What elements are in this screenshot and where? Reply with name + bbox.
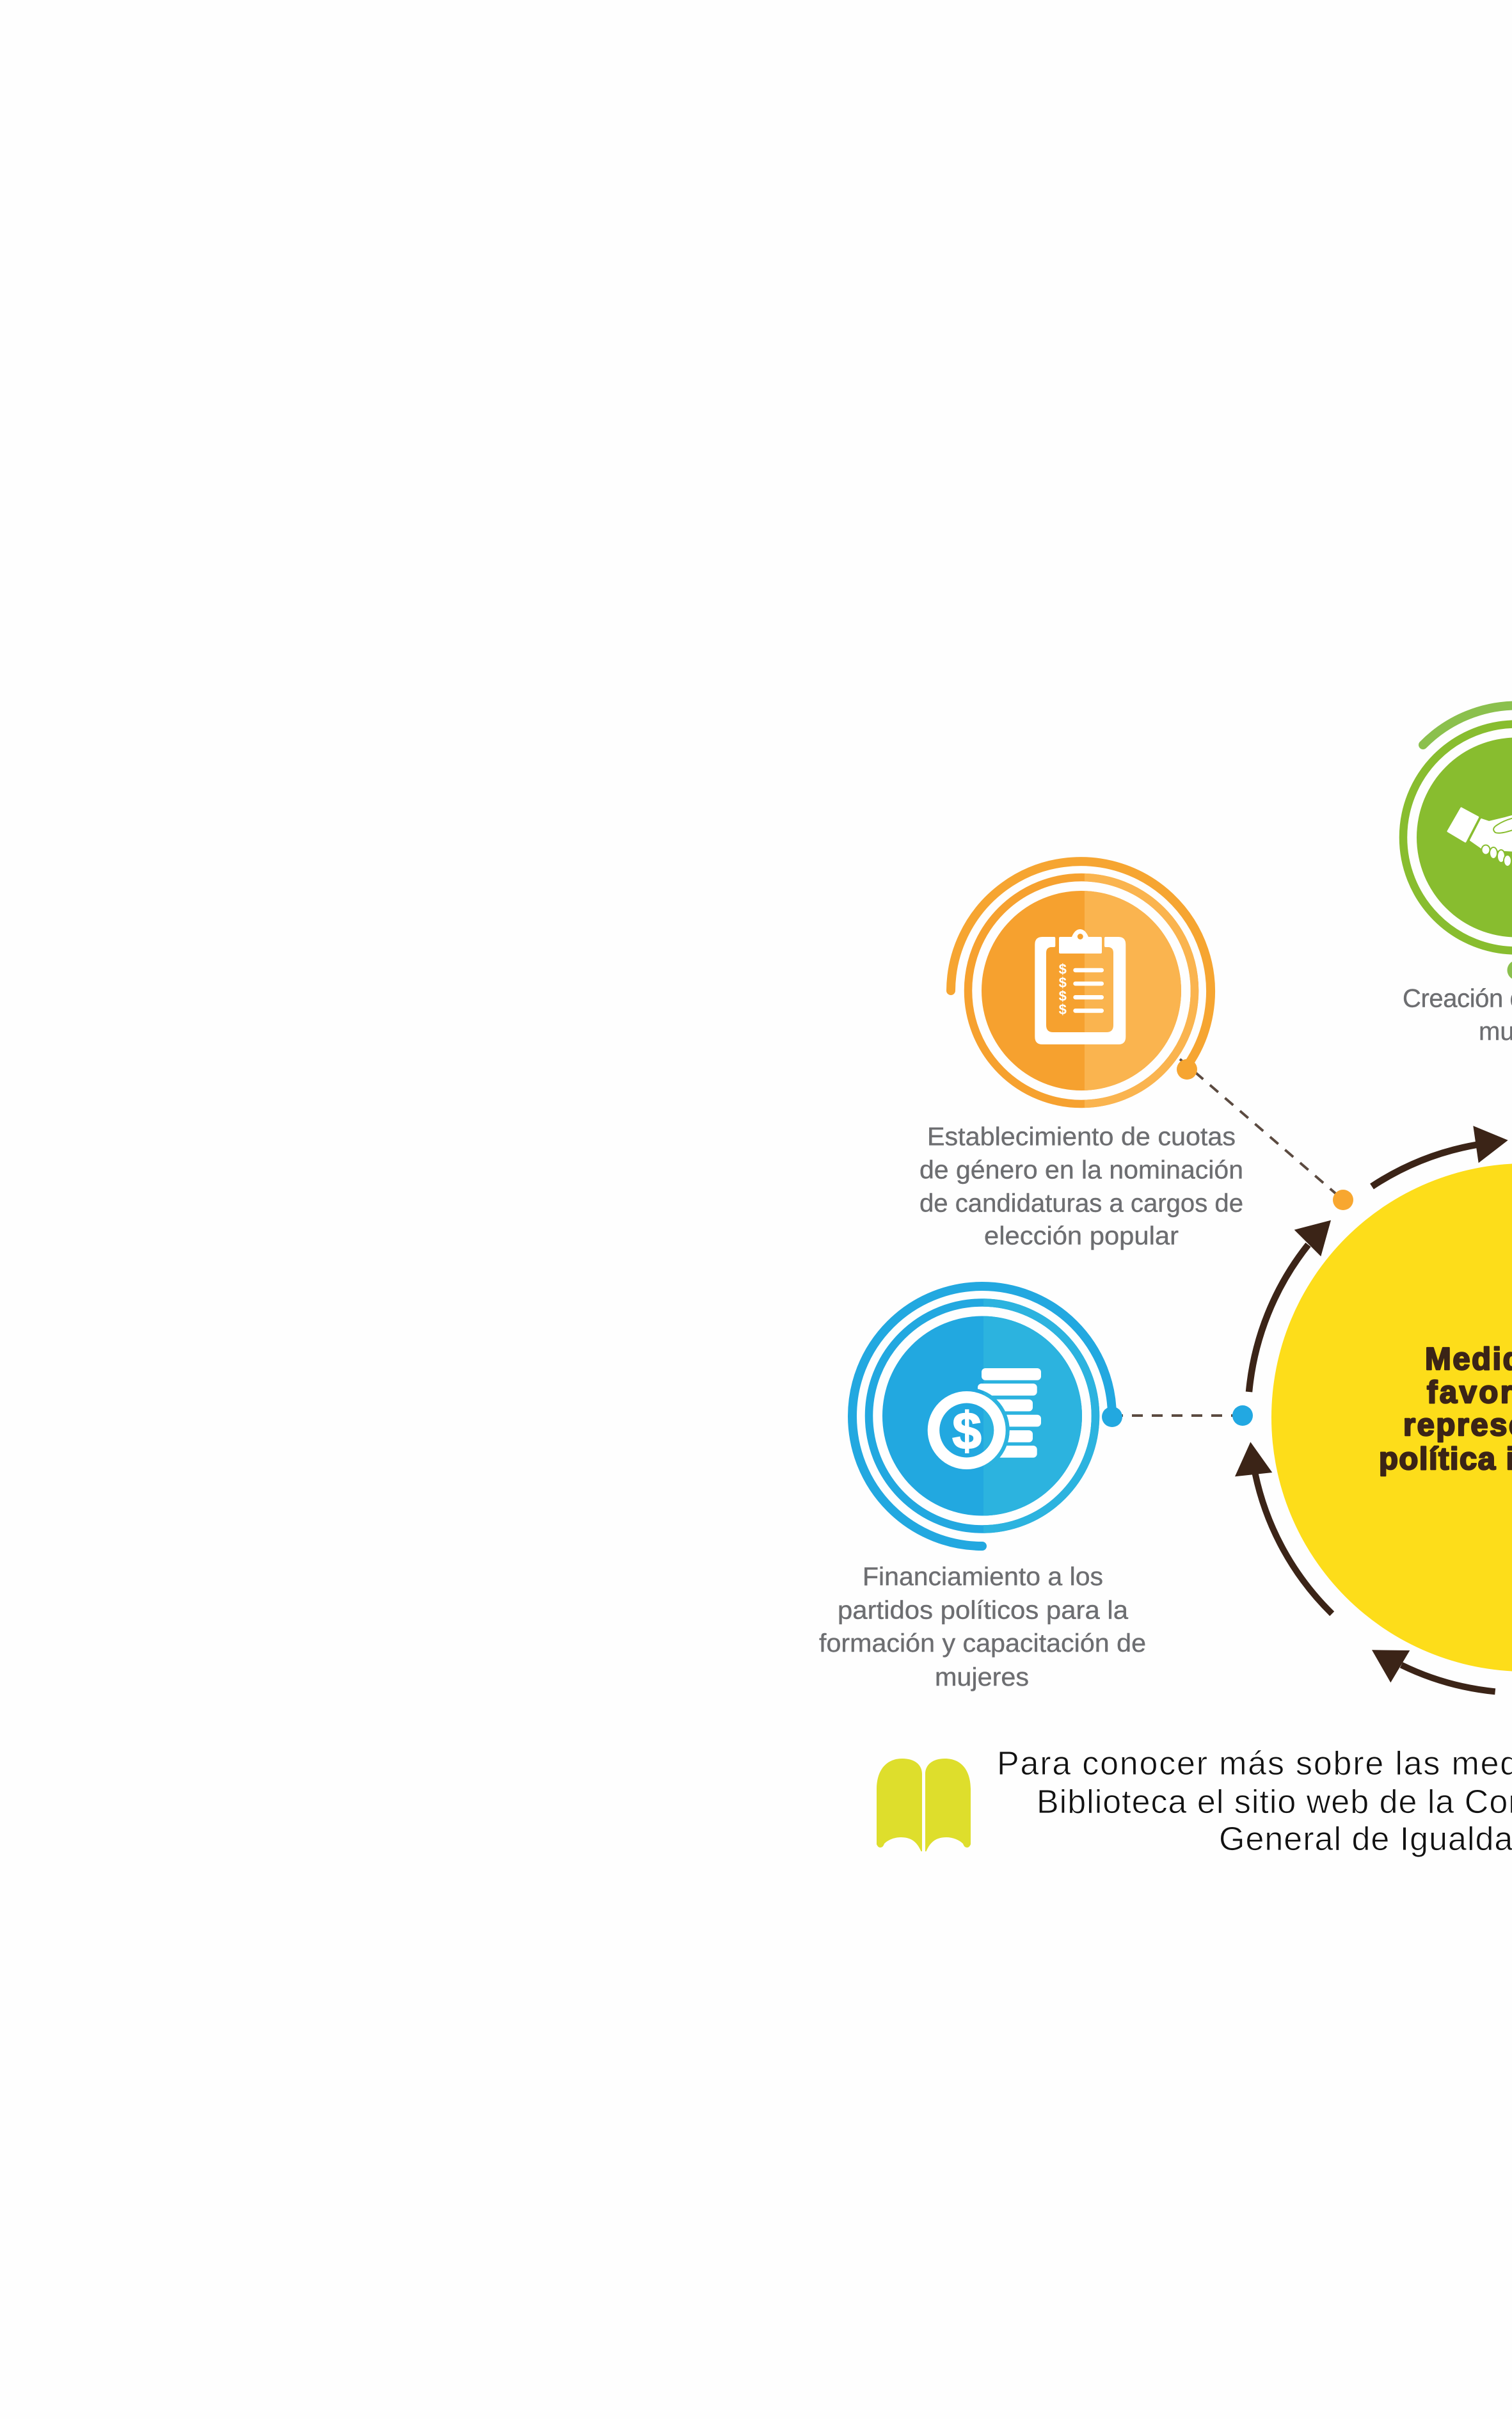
text: orange caption: de candidaturas a cargos de — [919, 1189, 1243, 1217]
disk — [982, 891, 1181, 1090]
outer spiral — [852, 1286, 1112, 1546]
end dot — [1102, 1407, 1122, 1427]
icon: dollar coin — [924, 1387, 1010, 1473]
outer spiral — [1423, 705, 1512, 745]
icon: clipboard — [1035, 929, 1126, 1044]
arrow: lower left — [1235, 1442, 1332, 1614]
ring — [968, 877, 1195, 1104]
disk — [882, 1316, 1082, 1515]
connector dot: orange — [1333, 1190, 1353, 1210]
text: blue caption: partidos políticos para la — [838, 1596, 1129, 1624]
disk — [1417, 737, 1512, 937]
arrow: top — [1372, 1126, 1508, 1186]
text: orange caption — [919, 1122, 1243, 1250]
icon: coins stack — [978, 1368, 1041, 1458]
panel: orange quota icon — [951, 861, 1211, 1104]
icon: dollar coin: $ — [952, 1402, 982, 1460]
icon: clipboard: $ — [1059, 1002, 1067, 1018]
connector: orange dashed line — [1180, 1059, 1343, 1200]
end dot — [1508, 960, 1512, 980]
icon: handshake — [1448, 808, 1512, 866]
connector dot: blue — [1232, 1405, 1253, 1426]
outer spiral — [951, 861, 1211, 1066]
icon: book — [877, 1759, 971, 1851]
panel: green network icon — [1403, 705, 1512, 980]
text: library note — [997, 1745, 1512, 1858]
text: green caption — [1403, 984, 1512, 1046]
text: blue caption — [819, 1563, 1146, 1691]
text: orange caption: de género en la nominación — [919, 1156, 1243, 1184]
center title — [1379, 1342, 1512, 1476]
arrow: upper left — [1249, 1220, 1331, 1392]
icon: clipboard: $ — [1059, 975, 1067, 991]
connector: blue dashed line — [1112, 1414, 1243, 1417]
icon: clipboard: $ — [1059, 988, 1067, 1004]
end dot — [1177, 1059, 1197, 1080]
text: orange caption: elección popular — [984, 1222, 1179, 1250]
text: orange caption: Establecimiento de cuotas — [927, 1122, 1236, 1151]
text: blue caption: formación y capacitación de — [819, 1629, 1146, 1657]
arrow: bottom — [1372, 1650, 1495, 1691]
ring — [1403, 724, 1512, 951]
icon: clipboard: $ — [1059, 961, 1067, 977]
text: blue caption: mujeres — [935, 1663, 1029, 1691]
central yellow circle with title — [1271, 1163, 1512, 1672]
text: blue caption: Financiamiento a los — [863, 1563, 1103, 1591]
panel: blue financing icon — [852, 1286, 1122, 1546]
ring — [869, 1303, 1095, 1529]
